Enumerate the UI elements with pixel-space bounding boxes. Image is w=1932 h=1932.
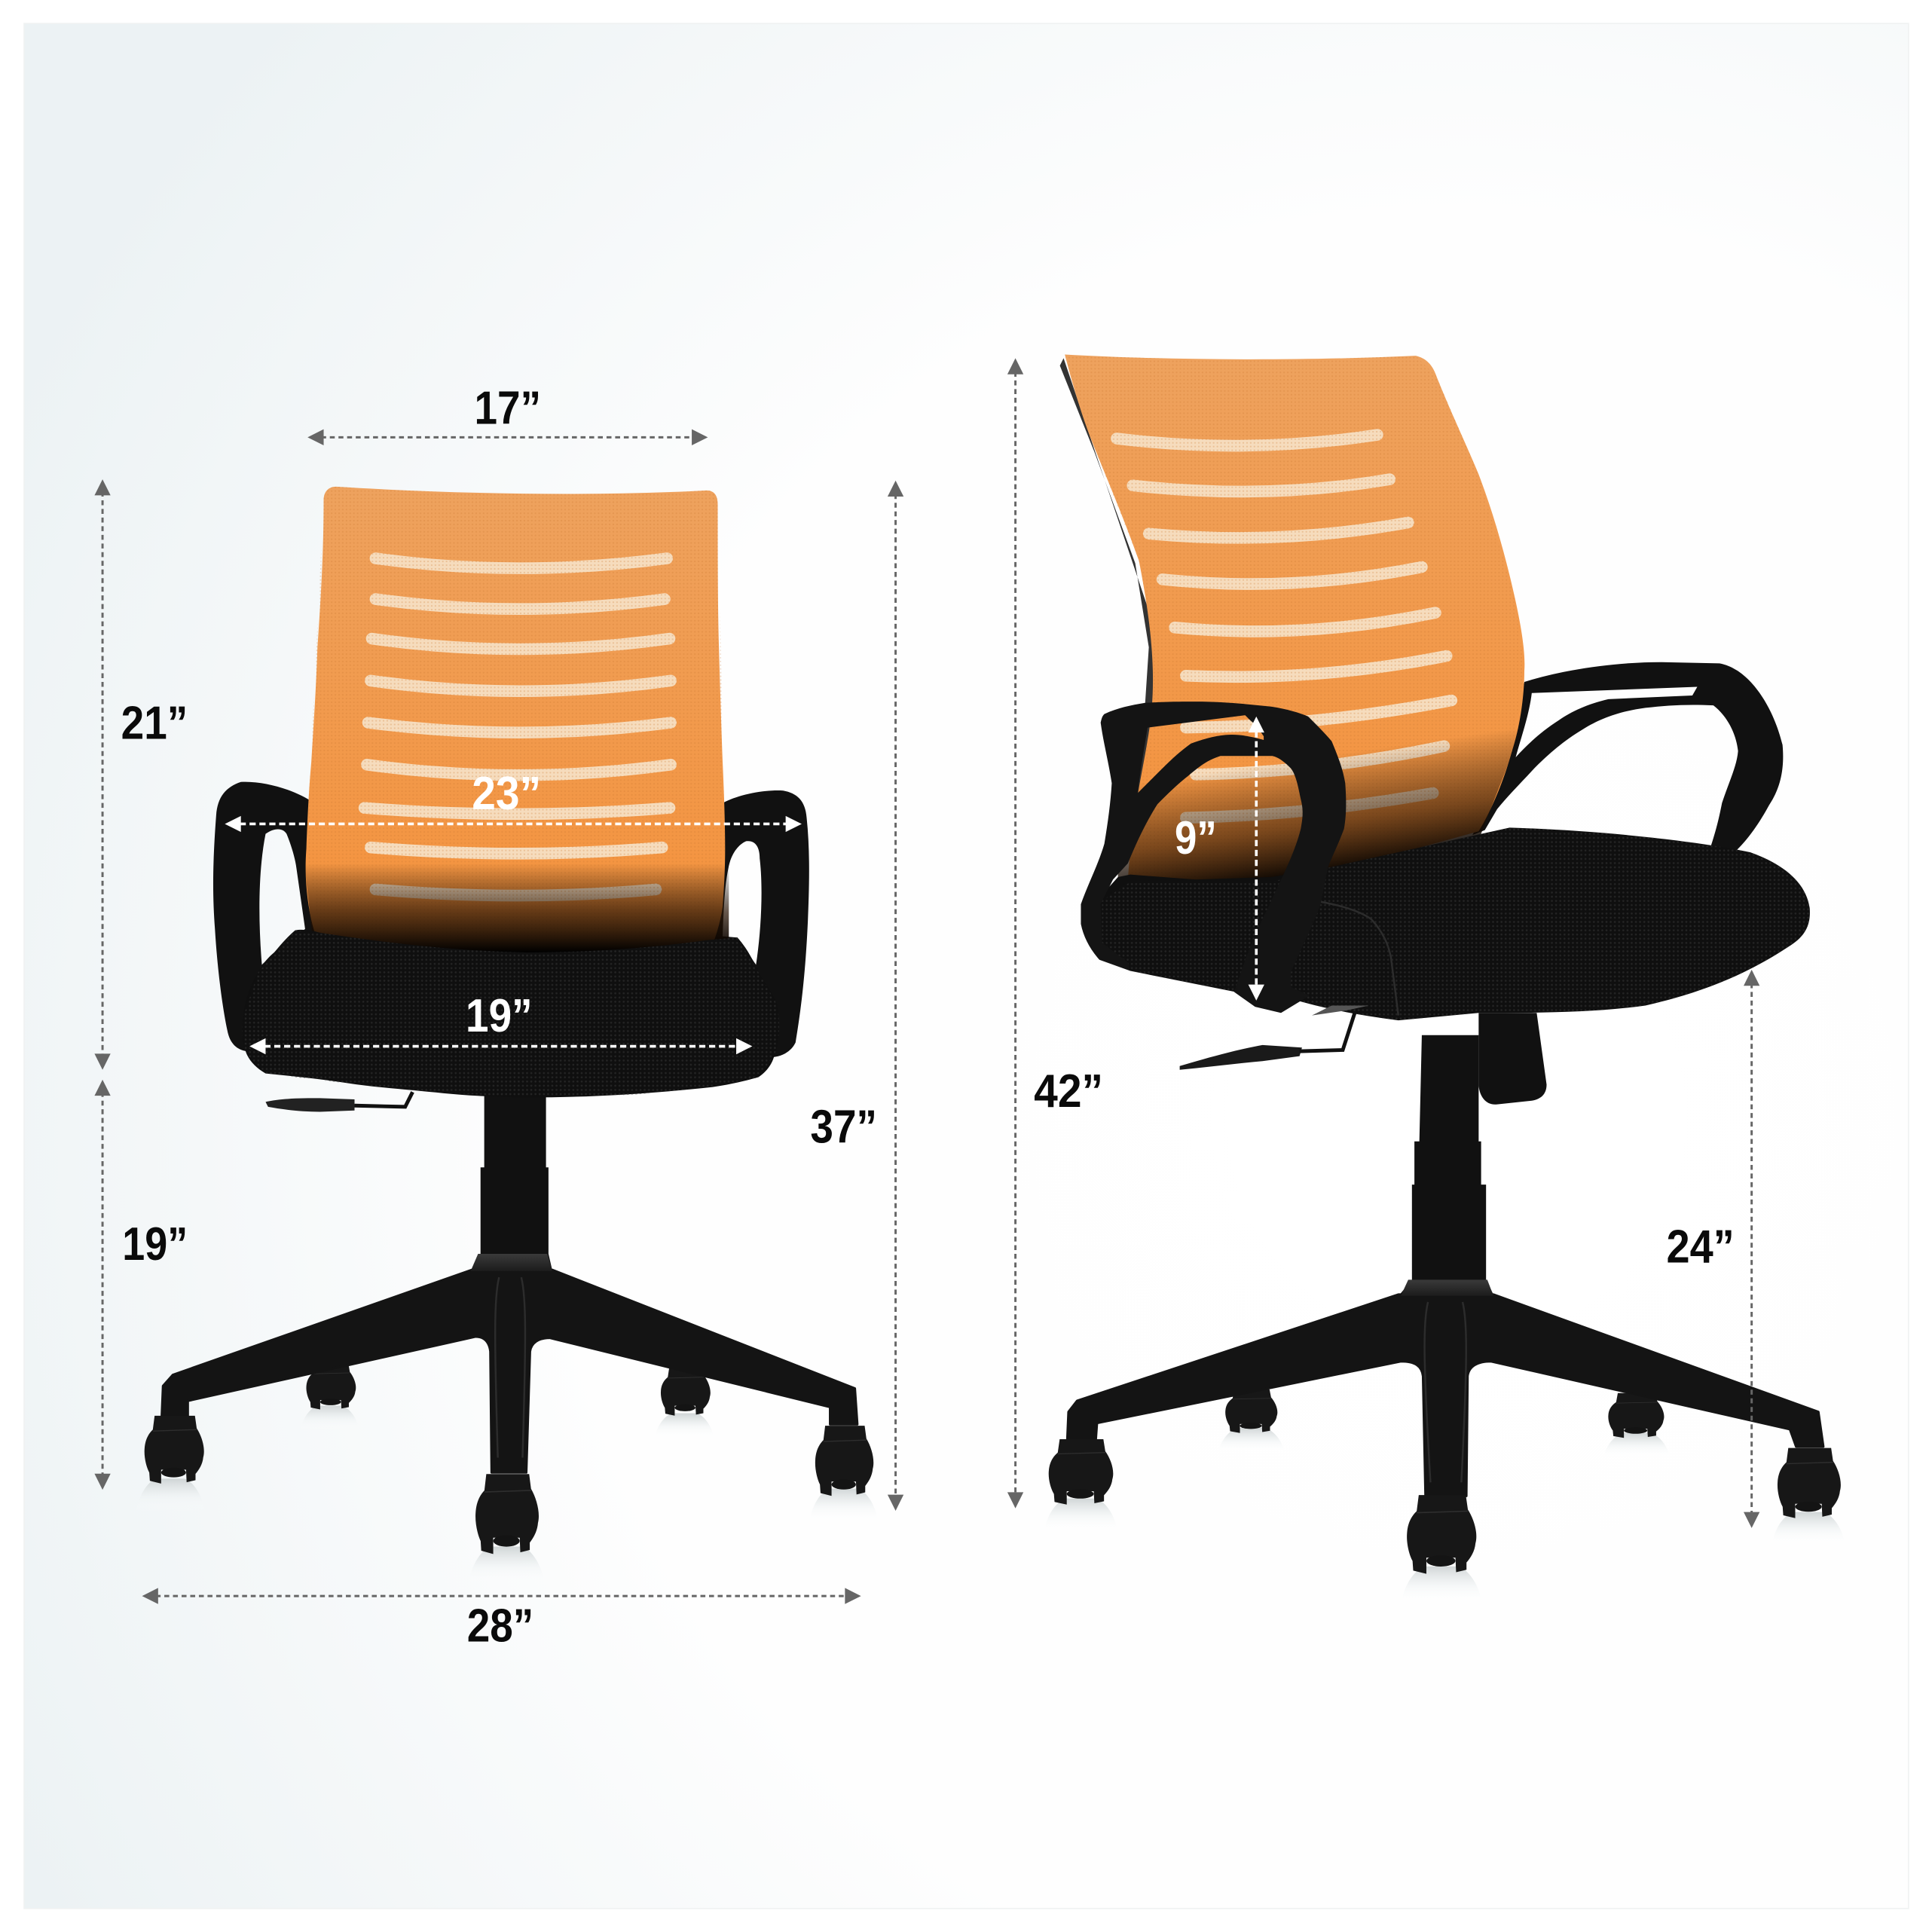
height lever — [1180, 1012, 1355, 1070]
gas lift column — [471, 1087, 552, 1271]
dimension: 17 inch backrest width — [307, 382, 708, 445]
star base — [1067, 1295, 1823, 1496]
floor reflections under side chair wheels — [1044, 1428, 1845, 1603]
right armrest — [711, 790, 809, 1057]
mesh seat — [1097, 827, 1810, 1020]
dimension: 23 inch arm width — [225, 768, 802, 832]
rear casters — [1225, 1389, 1664, 1438]
mesh slats — [1117, 435, 1451, 818]
front casters — [1049, 1439, 1841, 1574]
dimension: 19 inch seat width: 19” — [466, 990, 533, 1042]
dimension: 42 inch overall height: 42” — [1034, 1065, 1103, 1117]
dimension: 28 inch base width: 28” — [467, 1600, 533, 1652]
orange mesh backrest — [1060, 355, 1524, 892]
dimension: 37 inch front height — [810, 481, 903, 1511]
dimension: 19 inch seat height — [94, 1080, 188, 1490]
dimension: 9 inch arm height — [1175, 717, 1264, 1001]
height lever — [265, 1092, 413, 1111]
dimension: 19 inch seat width — [249, 990, 752, 1054]
dimension: 37 inch front height: 37” — [810, 1101, 877, 1153]
orange mesh backrest — [304, 487, 729, 961]
dimension: 23 inch arm width: 23” — [472, 768, 541, 820]
seat adjustment knob — [1478, 1013, 1547, 1105]
front view chair — [136, 487, 879, 1584]
dimension: 42 inch overall height — [1007, 358, 1103, 1509]
dimension: 21 inch back height — [94, 479, 188, 1070]
dimension: 28 inch base width — [142, 1588, 861, 1652]
mesh seat — [242, 930, 779, 1097]
gas lift column — [1399, 1035, 1493, 1296]
dimension: 24 inch seat height: 24” — [1667, 1221, 1735, 1273]
dimension: 21 inch back height: 21” — [121, 697, 188, 749]
dimension: 17 inch backrest width: 17” — [475, 382, 541, 434]
dimension: 24 inch seat height — [1667, 970, 1759, 1528]
floor reflections under front chair wheels — [136, 1406, 879, 1584]
front casters — [145, 1416, 873, 1554]
left armrest — [213, 782, 321, 1051]
near armrest — [1081, 702, 1346, 1013]
mesh slats — [365, 558, 671, 896]
side view chair — [1044, 355, 1845, 1603]
dimension: 19 inch seat height: 19” — [122, 1218, 188, 1270]
far armrest — [1472, 662, 1783, 852]
star base — [162, 1270, 857, 1472]
rear casters — [306, 1363, 711, 1416]
dimension: 9 inch arm height: 9” — [1175, 812, 1217, 864]
